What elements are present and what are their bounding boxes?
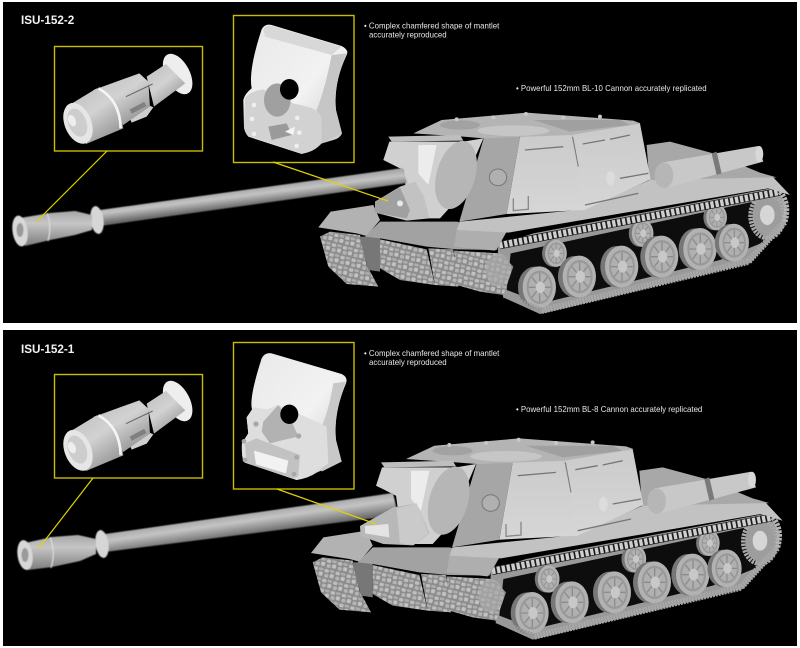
callout: cannon note: • Powerful 152mm BL-8 Cannon accurately replicated	[516, 405, 702, 414]
cannon barrel	[15, 493, 398, 571]
cannon barrel	[10, 168, 407, 247]
panel background top	[3, 2, 797, 323]
gun mantlet on tank	[360, 503, 429, 545]
leader line: muzzle	[36, 151, 107, 222]
leader line: mantlet	[277, 489, 376, 524]
callout: mantlet note: accurately reproduced	[369, 30, 447, 40]
gun mantlet on tank	[375, 182, 429, 221]
tank body	[311, 438, 783, 640]
inset: muzzle brake	[54, 46, 202, 151]
inset: gun mantlet	[234, 16, 354, 162]
panel background bottom	[3, 330, 797, 646]
leader line: muzzle	[39, 478, 93, 548]
callout: mantlet note: accurately reproduced	[369, 358, 447, 367]
callout: mantlet note: • Complex chamfered shape of mantlet	[364, 349, 499, 358]
leader line: mantlet	[273, 162, 388, 201]
panel: ISU-152-1	[3, 330, 797, 646]
callout: cannon note: • Powerful 152mm BL-10 Cannon accurately replicated	[516, 84, 707, 93]
inset: gun mantlet	[234, 342, 354, 489]
callout: mantlet note: • Complex chamfered shape of mantlet	[364, 22, 499, 30]
tank body	[318, 112, 790, 314]
heading: ISU-152-2: ISU-152-2	[21, 14, 75, 27]
inset: muzzle brake	[54, 374, 202, 478]
heading: ISU-152-1: ISU-152-1	[21, 343, 75, 356]
panel: ISU-152-2	[3, 2, 797, 323]
